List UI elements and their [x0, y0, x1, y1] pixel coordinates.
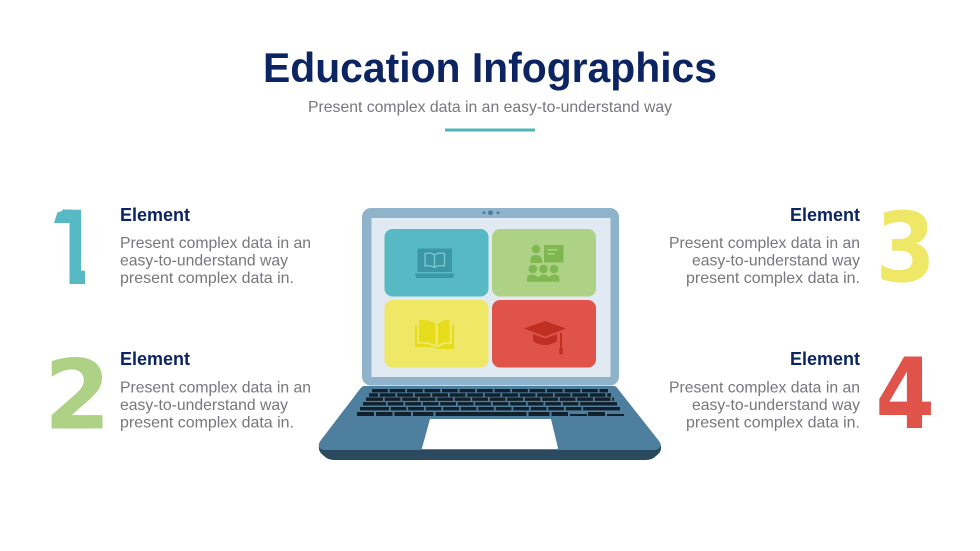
item 4: [669, 337, 935, 451]
laptop base lower edge: [319, 446, 661, 460]
number 3: 3: [876, 192, 936, 304]
tile: red: [492, 300, 596, 368]
item 2 body: easy-to-understand way: [120, 397, 288, 414]
number 4: 4: [876, 337, 935, 451]
item 4 body: Present complex data in an: [669, 380, 860, 396]
icon: graduation cap: [524, 321, 566, 354]
item 2: [44, 340, 311, 452]
laptop base: [319, 386, 661, 450]
laptop lid: [362, 208, 619, 386]
item 2 body: present complex data in.: [120, 414, 294, 432]
item 2 body: [120, 380, 311, 432]
item 1 body: easy-to-understand way: [120, 252, 288, 270]
item 1 body: present complex data in.: [120, 270, 294, 287]
screen: [372, 218, 610, 377]
item 3 body: easy-to-understand way: [692, 252, 860, 270]
item 3 body: present complex data in.: [686, 270, 860, 287]
item 4 body: [669, 380, 860, 432]
number 2: 2: [44, 340, 111, 452]
subtitle: Present complex data in an easy-to-understand way: [308, 99, 672, 116]
item 1: [36, 191, 311, 309]
item 3 body: Present complex data in an: [669, 235, 860, 252]
item 4 body: easy-to-understand way: [692, 397, 860, 414]
tile: teal: [384, 229, 488, 296]
item 1 body: [120, 235, 311, 287]
icon: teacher and students: [527, 245, 564, 282]
icon: laptop with book: [415, 248, 454, 278]
item 4 heading: Element: [790, 348, 860, 369]
item 3 body: [669, 235, 860, 287]
item 3 heading: Element: [790, 204, 860, 225]
number 1: 1: [45, 191, 100, 309]
trackpad: [422, 419, 558, 449]
title underline: [445, 128, 535, 132]
camera: [482, 210, 500, 215]
item 1 body: Present complex data in an: [120, 235, 311, 252]
mask trimming the serif foot and low flag of the numeral 1: [36, 198, 110, 292]
item 2 heading: Element: [120, 348, 190, 369]
tile: green: [492, 229, 596, 296]
laptop: [319, 208, 661, 460]
item 3: [669, 192, 936, 304]
flag of the numeral 1: [55, 210, 72, 223]
title: Education Infographics: [263, 44, 717, 91]
icon: open book: [415, 320, 454, 349]
item 4 body: present complex data in.: [686, 414, 860, 432]
keyboard: [357, 391, 624, 416]
item 1 heading: Element: [120, 204, 190, 225]
tile: yellow: [384, 300, 488, 368]
item 2 body: Present complex data in an: [120, 380, 311, 396]
